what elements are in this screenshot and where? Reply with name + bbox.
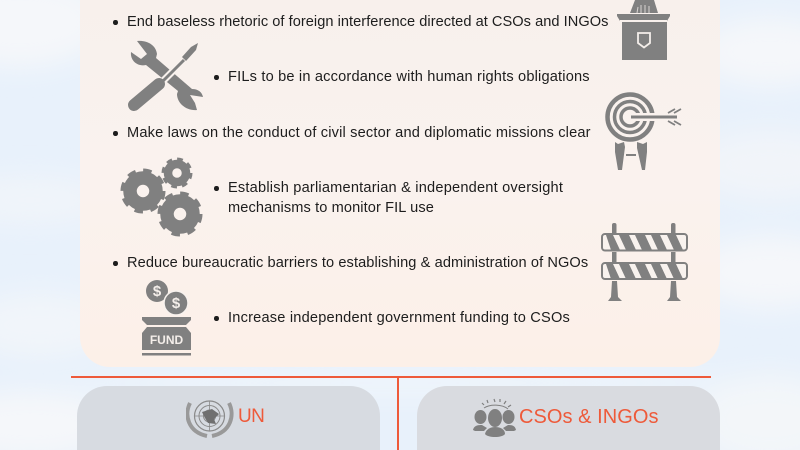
icon: fund: $ [172, 295, 181, 312]
text: reduce barriers: Reduce bureaucratic barriers to establishing & administration of NGOs [127, 255, 588, 271]
panel: CSOs and INGOs [417, 386, 720, 450]
text: funding: Increase independent government funding to CSOs [228, 310, 570, 326]
panel: UN [77, 386, 380, 450]
icon: fund [142, 280, 191, 356]
icon: UN emblem [186, 400, 234, 438]
panel: recommendations card [80, 0, 720, 367]
icon: fund: FUND [150, 333, 183, 347]
icon: people group [473, 398, 516, 437]
text: oversight mechanisms: Establish parliamentarian & independent oversight [228, 180, 563, 196]
heading: CSOs and INGOs: CSOs & INGOs [519, 406, 659, 428]
divider: horizontal rule [71, 376, 711, 378]
icon: fund: $ [153, 283, 162, 300]
heading: UN: UN [238, 406, 264, 427]
icon: gears [120, 158, 202, 236]
text: oversight mechanisms [228, 178, 563, 218]
text: end baseless rhetoric: End baseless rhetoric of foreign interference directed at CSOs and INGOs [127, 14, 608, 30]
icon: wrench and screwdriver [128, 40, 203, 111]
text: laws clear: Make laws on the conduct of civil sector and diplomatic missions clear [127, 125, 591, 141]
divider: vertical rule [397, 377, 399, 450]
icon: target with arrow [605, 92, 682, 170]
text: FILs human rights: FILs to be in accordance with human rights obligations [228, 69, 590, 85]
text: oversight mechanisms: mechanisms to monitor FIL use [228, 200, 434, 216]
icon: podium with shield [617, 0, 670, 60]
icon: road barrier [601, 223, 688, 301]
